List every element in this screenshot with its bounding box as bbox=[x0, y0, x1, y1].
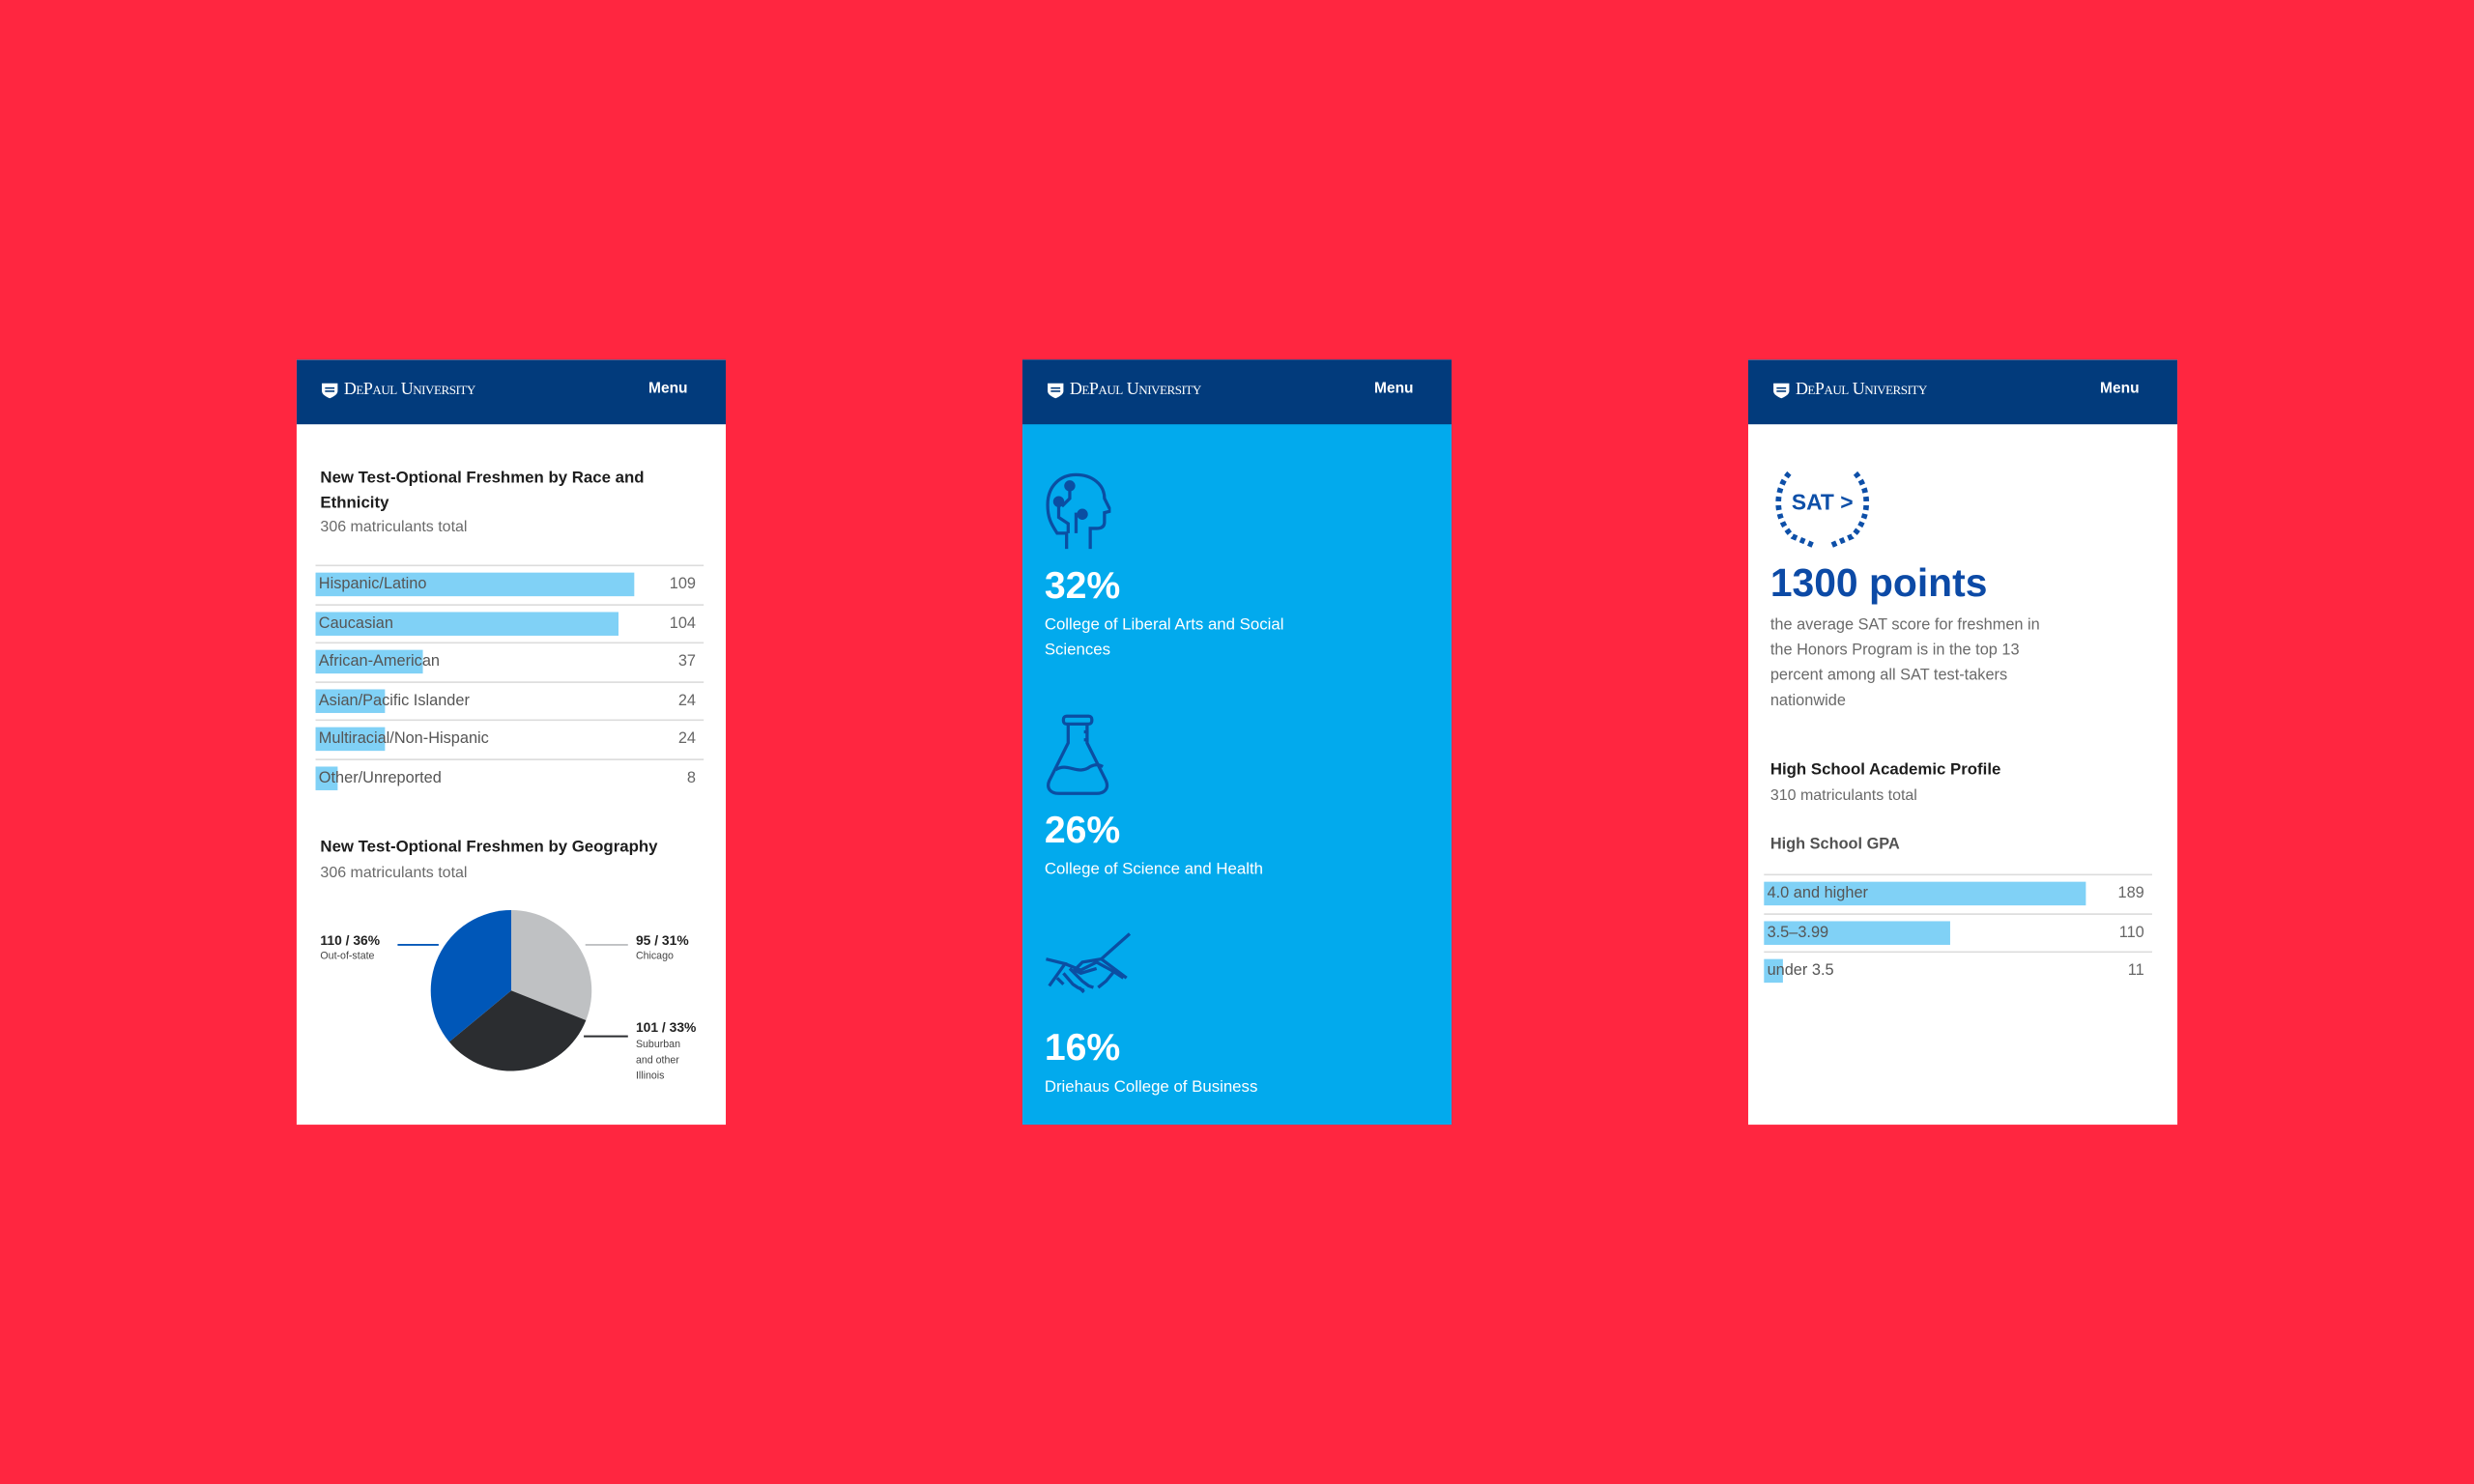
logo: DePaul University bbox=[1070, 380, 1201, 399]
stat: 26% bbox=[1045, 810, 1263, 878]
logo: DePaul University bbox=[344, 380, 475, 399]
stat: 26%: 26% bbox=[1045, 810, 1120, 852]
icon: flask bbox=[1047, 715, 1109, 795]
stat: 16%: Driehaus College of Business bbox=[1045, 1079, 1257, 1097]
bar chart: GPA bbox=[1764, 873, 2152, 984]
pie chart: geography: 110 / 36% bbox=[320, 932, 380, 948]
stat: 1300 points: 1300 points bbox=[1770, 561, 1987, 606]
panel: SAT and GPA bbox=[1748, 359, 2177, 1125]
pie chart: geography: Out-of-state bbox=[320, 951, 375, 962]
bar chart: race: 109 bbox=[670, 576, 696, 593]
bar chart: race: Other/Unreported bbox=[319, 769, 442, 786]
menu: Menu bbox=[1374, 380, 1414, 397]
bar chart: race: 24 bbox=[678, 692, 696, 709]
menu: Menu bbox=[648, 380, 688, 397]
pie chart: geography bbox=[320, 910, 696, 1082]
pie chart: geography: 95 / 31% bbox=[636, 932, 689, 948]
bar chart: race: 37 bbox=[678, 653, 696, 671]
logo: DePaul University bbox=[1796, 380, 1927, 399]
pie chart: geography: 101 / 33% bbox=[636, 1019, 696, 1035]
stat: 32%: Sciences bbox=[1045, 642, 1110, 659]
subtitle: 310 matriculants total bbox=[1770, 787, 1917, 805]
bar chart: GPA: 110 bbox=[2119, 924, 2144, 941]
bar chart: race: Multiracial/Non-Hispanic bbox=[319, 730, 489, 748]
icon: head circuit bbox=[1046, 473, 1111, 549]
pie chart: geography: Illinois bbox=[636, 1070, 664, 1082]
pie chart: geography: Suburban bbox=[636, 1039, 680, 1050]
header bar bbox=[297, 359, 726, 424]
bar chart: GPA: 189 bbox=[2118, 885, 2144, 902]
stat: 32%: College of Liberal Arts and Social bbox=[1045, 616, 1283, 634]
stat: 16%: 16% bbox=[1045, 1027, 1120, 1070]
bar chart: GPA: under 3.5 bbox=[1768, 962, 1834, 980]
bar chart: race: 24 bbox=[678, 730, 696, 748]
bar chart: GPA: 11 bbox=[2128, 962, 2144, 980]
header bar bbox=[1748, 359, 2177, 424]
stat: 16% bbox=[1045, 1027, 1257, 1097]
panel: race and geography bbox=[297, 359, 726, 1125]
pie chart: geography: and other bbox=[636, 1054, 679, 1066]
bar chart: race: African-American bbox=[319, 653, 440, 671]
subheading: GPA: High School GPA bbox=[1770, 836, 1900, 853]
bar chart: GPA: 4.0 and higher bbox=[1768, 885, 1868, 902]
bar chart: race bbox=[315, 564, 704, 790]
bar chart: race: Hispanic/Latino bbox=[319, 576, 426, 593]
bar chart: race: 104 bbox=[670, 614, 696, 632]
pie chart: geography: Chicago bbox=[636, 951, 674, 962]
header bar bbox=[1022, 359, 1452, 424]
subtitle: 306 matriculants total bbox=[320, 519, 467, 536]
bar chart: race: Caucasian bbox=[319, 614, 393, 632]
subtitle: 306 matriculants total bbox=[320, 865, 467, 882]
panel: colleges bbox=[1022, 359, 1452, 1125]
stat: 32% bbox=[1045, 564, 1283, 659]
heading: academic profile: High School Academic Profile bbox=[1770, 762, 2000, 780]
description: the average SAT score for freshmen in the Honors Program is in the top 13 percent among all SAT test-takers nationwide bbox=[1770, 616, 2040, 710]
icon: SAT laurel bbox=[1775, 471, 1869, 548]
heading: race: New Test-Optional Freshmen by Race and Ethnicity bbox=[320, 471, 644, 513]
icon: handshake bbox=[1046, 932, 1131, 993]
bar chart: race: 8 bbox=[687, 769, 696, 786]
stat: 26%: College of Science and Health bbox=[1045, 861, 1263, 878]
icon: SAT laurel: SAT > bbox=[1792, 489, 1854, 514]
stat: 32%: 32% bbox=[1045, 564, 1120, 608]
bar chart: GPA: 3.5–3.99 bbox=[1768, 924, 1828, 941]
bar chart: race: Asian/Pacific Islander bbox=[319, 692, 470, 709]
menu: Menu bbox=[2100, 380, 2140, 397]
heading: geography: New Test-Optional Freshmen by Geography bbox=[320, 840, 657, 857]
